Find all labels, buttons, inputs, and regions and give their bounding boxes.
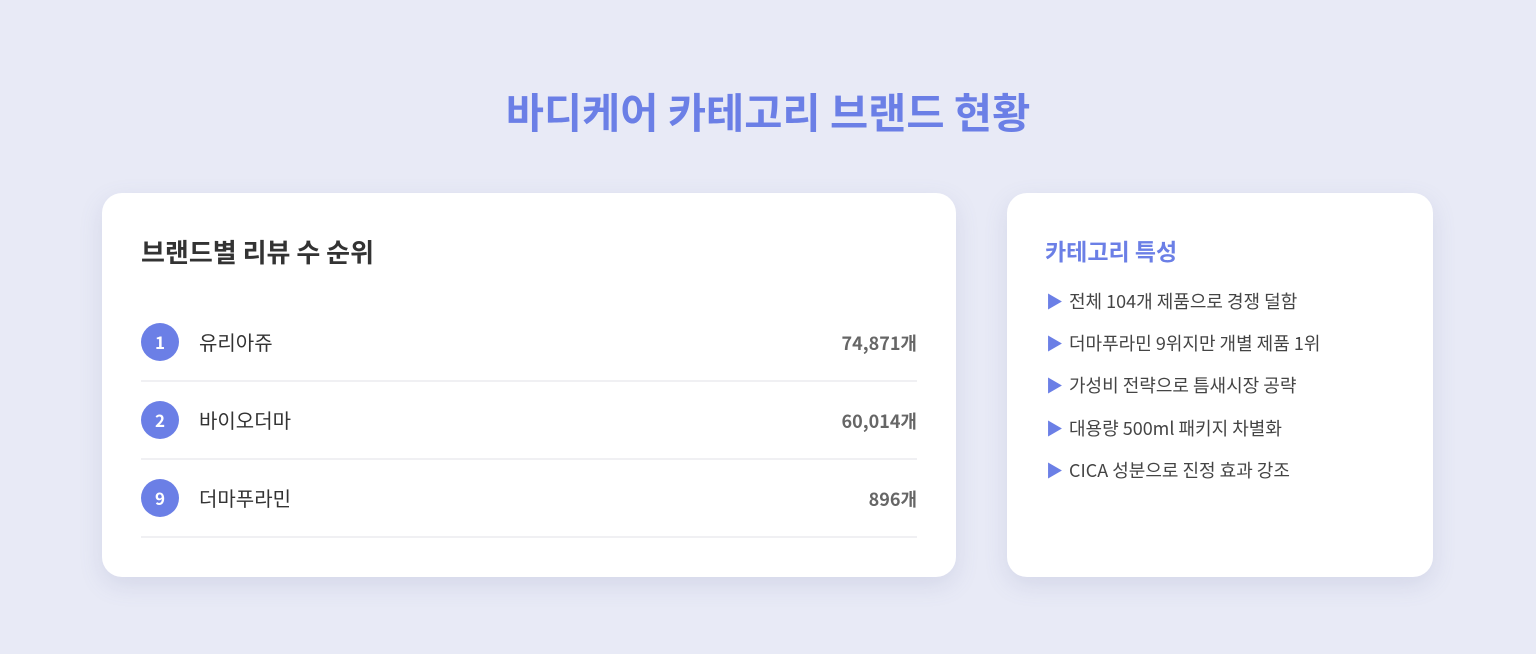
row 9: 896개 — [869, 486, 917, 512]
row 9: 9 — [155, 485, 165, 510]
row 2: 2 — [155, 407, 165, 432]
title: 바디케어 카테고리 브랜드 현황 — [506, 80, 1030, 140]
heading: ranking: 브랜드별 리뷰 수 순위 — [141, 233, 374, 270]
row 9: 더마푸라민 — [199, 483, 291, 512]
row 1 — [141, 304, 917, 382]
panel: brand ranking — [102, 193, 956, 577]
feature list: ▶ CICA 성분으로 진정 효과 강조 — [1046, 457, 1290, 483]
row 2: 60,014개 — [841, 408, 917, 434]
heading: features: 카테고리 특성 — [1045, 233, 1177, 267]
row 1: 1 — [155, 329, 165, 354]
row 9 — [141, 460, 917, 538]
row 1: 유리아쥬 — [199, 327, 273, 356]
row 2 — [141, 382, 917, 460]
feature list: ▶ 더마푸라민 9위지만 개별 제품 1위 — [1046, 330, 1320, 356]
feature list: ▶ 대용량 500ml 패키지 차별화 — [1046, 415, 1282, 441]
feature list: ▶ 전체 104개 제품으로 경쟁 덜함 — [1046, 288, 1297, 314]
row 2: 바이오더마 — [199, 405, 291, 434]
row 1: 74,871개 — [841, 330, 917, 356]
feature list — [1046, 288, 1320, 483]
feature list: ▶ 가성비 전략으로 틈새시장 공략 — [1046, 372, 1296, 398]
panel: category features — [1007, 193, 1433, 577]
